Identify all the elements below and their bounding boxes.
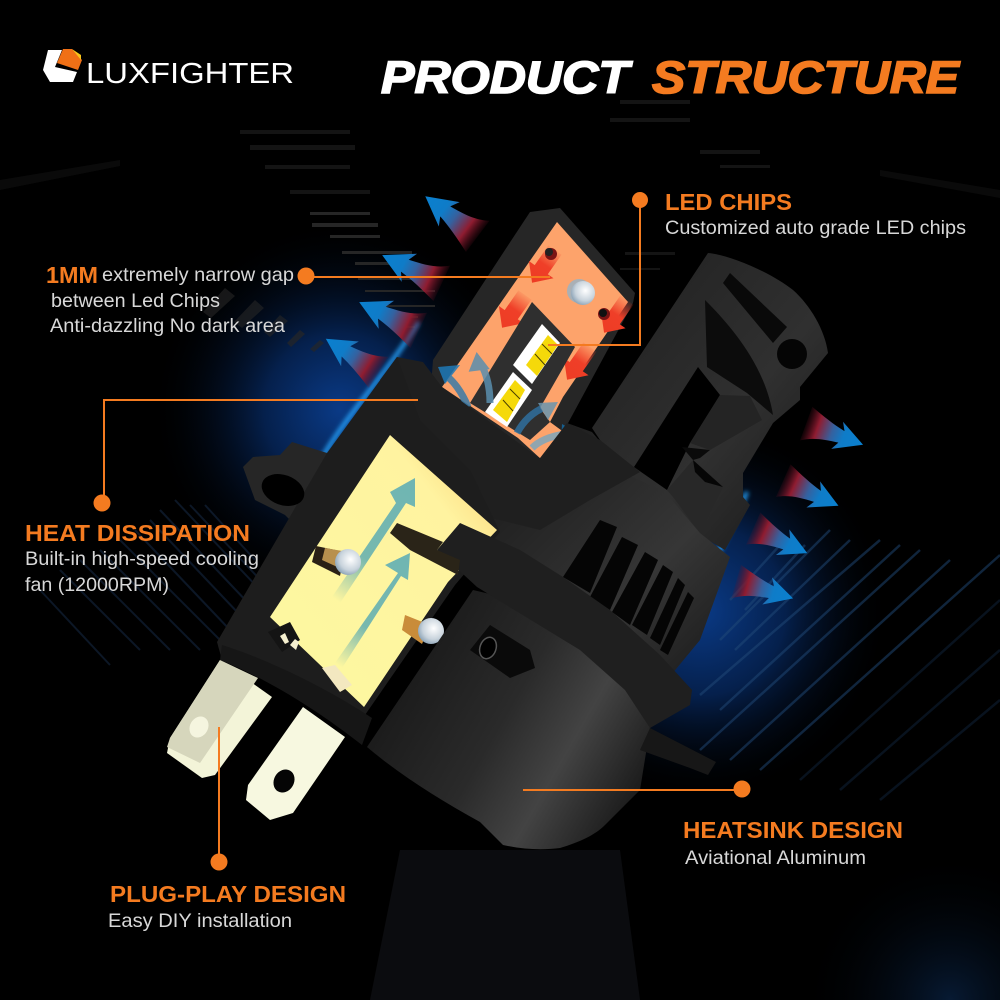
callout: 1MM gap: between Led Chips xyxy=(51,290,220,312)
locking fin xyxy=(390,523,460,575)
board screw xyxy=(567,279,595,305)
title xyxy=(381,52,961,103)
LED chip bottom xyxy=(485,372,532,427)
callout: heatsink design: Aviational Aluminum xyxy=(685,847,866,869)
red heat arrows xyxy=(490,241,639,388)
callout: heat dissipation: Built-in high-speed cooling xyxy=(25,548,259,570)
callout: heat dissipation: fan (12000RPM) xyxy=(25,574,169,596)
callout: LED chips xyxy=(548,189,966,345)
small connectors xyxy=(268,622,352,692)
bottom tab xyxy=(640,728,716,775)
bulb: orange LED board xyxy=(438,222,639,460)
bulb: left lug xyxy=(243,442,345,540)
title: STRUCTURE xyxy=(652,52,961,103)
callout: LED chips: LED CHIPS xyxy=(665,189,792,215)
callout: heatsink design xyxy=(523,780,903,869)
callout: 1MM gap: 1MM xyxy=(46,262,98,288)
board holes xyxy=(545,248,610,320)
airflow arrows: right xyxy=(731,407,869,615)
logo: LUXFIGHTER xyxy=(86,58,294,90)
title: PRODUCT xyxy=(381,52,633,103)
bulb: LED board frame xyxy=(430,208,635,470)
mount hole xyxy=(470,625,535,678)
airflow arrow lower xyxy=(335,553,410,668)
callout: plug-play design: PLUG-PLAY DESIGN xyxy=(110,881,346,907)
bulb: upper housing band xyxy=(380,357,640,530)
yellow fan panel xyxy=(268,435,497,707)
base ring xyxy=(220,645,372,745)
callout: heatsink design: HEATSINK DESIGN xyxy=(683,817,903,843)
airflow arrow upper xyxy=(332,478,415,603)
LED chip top xyxy=(513,324,560,384)
callout: 1MM gap: Anti-dazzling No dark area xyxy=(50,315,285,337)
airflow arrows: left xyxy=(316,181,489,388)
bulb: rear bracket arm xyxy=(592,253,828,550)
screw lower xyxy=(402,615,444,644)
callout: heat dissipation xyxy=(25,400,418,596)
hole in lug xyxy=(257,468,309,512)
bulb: side rib xyxy=(217,357,500,715)
collar xyxy=(437,523,692,728)
callout: plug-play design: Easy DIY installation xyxy=(108,910,292,932)
logo xyxy=(43,49,294,90)
callout: heat dissipation: HEAT DISSIPATION xyxy=(25,520,250,546)
screw upper xyxy=(312,546,361,576)
callout: plug-play design xyxy=(108,727,346,932)
callout: 1MM gap xyxy=(46,262,550,337)
terminal spades xyxy=(167,660,345,820)
bulb: main round body with slots xyxy=(420,423,730,680)
blue curved airflow arrows xyxy=(438,355,578,448)
callout: 1MM gap: extremely narrow gap xyxy=(102,264,294,286)
chip plate xyxy=(470,302,575,440)
lower cylinder xyxy=(367,590,716,849)
callout: LED chips: Customized auto grade LED chips xyxy=(665,217,966,239)
